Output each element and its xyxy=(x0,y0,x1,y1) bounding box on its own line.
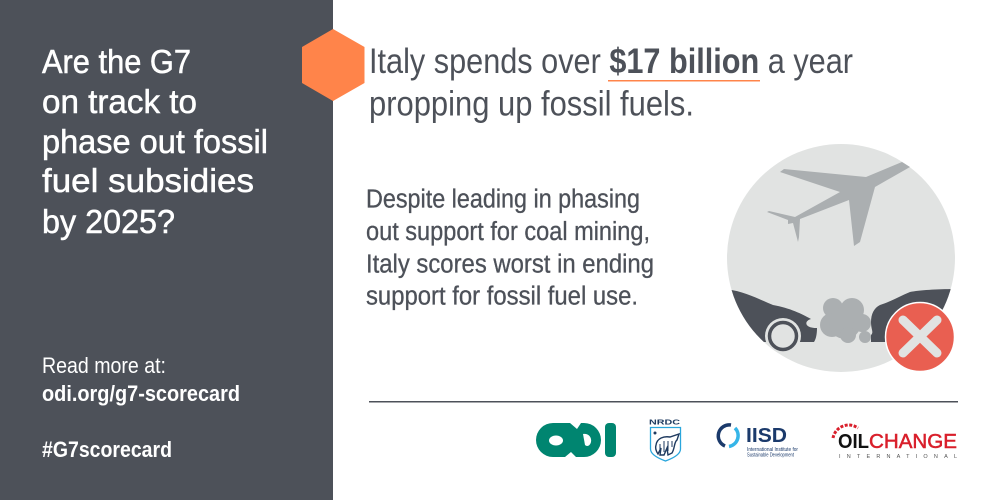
panel: left sidebar xyxy=(0,0,333,500)
icon: orange hexagon xyxy=(302,29,364,101)
icon: red cross badge xyxy=(886,302,954,372)
logo: Oil Change International: INTERNATIONAL xyxy=(839,454,957,460)
logo: NRDC xyxy=(649,418,681,461)
heading: sidebar question: on track to xyxy=(42,83,197,120)
heading: sidebar question: by 2025? xyxy=(42,203,175,240)
text: read more: Read more at: xyxy=(42,353,166,378)
text: body copy: Italy scores worst in ending xyxy=(366,250,654,278)
logo: ODI xyxy=(536,423,616,457)
divider xyxy=(369,401,958,402)
text: body copy: out support for coal mining, xyxy=(366,218,650,246)
headline xyxy=(369,42,853,124)
logo: IISD: IISD xyxy=(746,425,787,447)
logo: Oil Change International xyxy=(833,425,957,460)
heading: sidebar question: phase out fossil xyxy=(42,123,268,160)
logo: Oil Change International: CHANGE xyxy=(869,431,957,453)
icon: right car xyxy=(871,289,951,342)
text: body copy: Despite leading in phasing xyxy=(366,186,640,214)
text: hashtag: #G7scorecard xyxy=(42,437,172,462)
logo: IISD xyxy=(718,425,798,458)
icon: left car xyxy=(732,290,817,352)
text: body copy: support for fossil fuel use. xyxy=(366,282,638,310)
text: body copy xyxy=(366,186,654,310)
headline: propping up fossil fuels. xyxy=(369,84,694,124)
icon: exhaust cloud xyxy=(820,298,871,343)
heading: sidebar question xyxy=(42,43,268,240)
illustration: plane, cars and exhaust xyxy=(725,144,960,372)
heading: sidebar question: Are the G7 xyxy=(42,43,191,80)
logo: IISD: International Institute for xyxy=(747,447,798,453)
logo: NRDC: NRDC xyxy=(649,418,681,426)
logo: Oil Change International: OIL xyxy=(838,431,869,453)
headline: Italy spends over $17 billion a year xyxy=(369,42,853,81)
text: read more: odi.org/g7-scorecard xyxy=(42,381,240,406)
logo: IISD: Sustainable Development xyxy=(747,452,795,458)
icon: airplane xyxy=(767,162,910,246)
text: read more xyxy=(42,353,240,406)
heading: sidebar question: fuel subsidies xyxy=(42,162,254,199)
